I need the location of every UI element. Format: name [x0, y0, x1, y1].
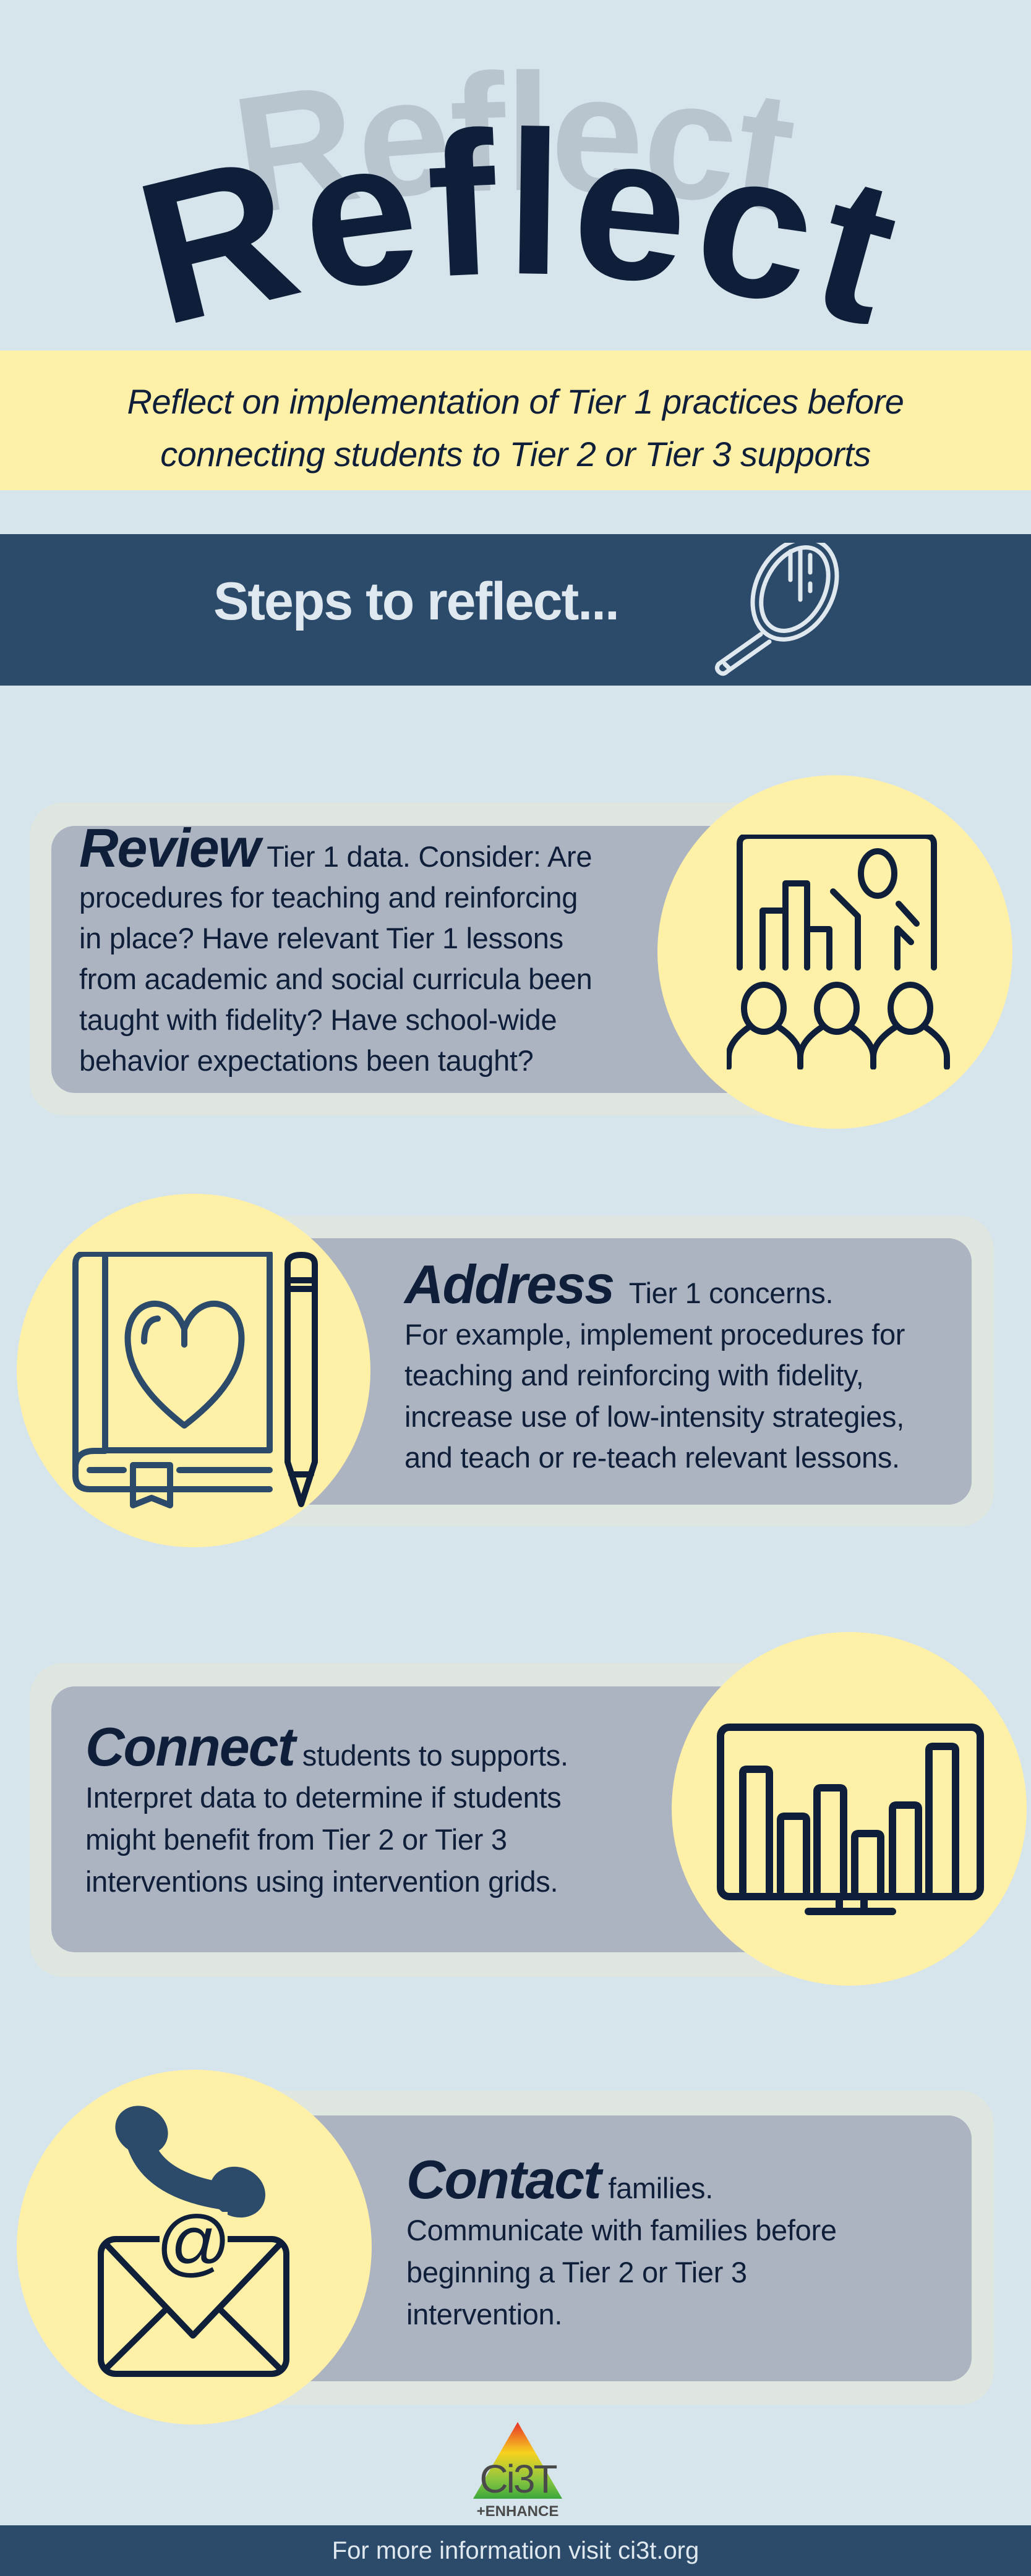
text: contact	[406, 2149, 837, 2331]
text: connect: Connect students to supports.	[85, 1716, 568, 1777]
text: address: teaching and reinforcing with fidelity,	[404, 1359, 863, 1392]
text: review: procedures for teaching and reinforcing	[79, 881, 578, 914]
text: connect: might benefit from Tier 2 or Tier 3	[85, 1823, 507, 1856]
text: review	[79, 817, 592, 1077]
title: Reflect	[142, 69, 896, 324]
logo: Ci3T Enhance: +ENHANCE	[477, 2503, 558, 2520]
steps band	[0, 534, 1031, 686]
icon circle: book and pencil	[17, 1194, 370, 1547]
text: contact: Contact families.	[406, 2149, 713, 2210]
text: contact: Communicate with families before	[406, 2214, 837, 2247]
panel: contact	[17, 2070, 994, 2425]
text: address: For example, implement procedures for	[404, 1318, 905, 1350]
text: review: taught with fidelity? Have school-wide	[79, 1003, 557, 1036]
ghost title: Reflect	[239, 69, 794, 210]
text: address	[403, 1254, 905, 1474]
subtitle text: connecting students to Tier 2 or Tier 3 supports	[160, 435, 871, 474]
panel: address	[17, 1194, 994, 1547]
text: contact: intervention.	[406, 2298, 562, 2331]
text: review: from academic and social curricula been	[79, 963, 592, 995]
text: address: and teach or re-teach relevant lessons.	[404, 1441, 900, 1474]
text: contact: beginning a Tier 2 or Tier 3	[406, 2256, 747, 2289]
subtitle text	[127, 382, 904, 474]
text: connect	[85, 1716, 568, 1898]
text: address: Address Tier 1 concerns.	[404, 1254, 833, 1315]
panel: connect	[30, 1632, 1027, 1986]
subtitle text: Reflect on implementation of Tier 1 practices before	[127, 382, 904, 421]
icon circle: presentation	[657, 775, 1012, 1129]
icon: hand mirror	[715, 543, 839, 676]
text: review: Review Tier 1 data. Consider: Are	[79, 817, 592, 878]
icon circle: chart monitor	[672, 1632, 1027, 1986]
text: connect: interventions using intervention grids.	[85, 1865, 558, 1898]
icon circle: phone and email	[17, 2070, 372, 2425]
logo: Ci3T Enhance: Ci3T	[479, 2457, 557, 2501]
steps heading: Steps to reflect...	[213, 572, 618, 631]
logo: Ci3T Enhance	[473, 2422, 562, 2520]
text: connect: Interpret data to determine if students	[85, 1781, 561, 1814]
panel: review	[30, 775, 1012, 1129]
icon: envelope	[98, 2206, 289, 2377]
footer	[0, 2525, 1031, 2576]
text: review: behavior expectations been taught?	[79, 1044, 534, 1077]
text: address: increase use of low-intensity strategies,	[404, 1400, 904, 1433]
text: review: in place? Have relevant Tier 1 lessons	[79, 922, 563, 954]
subtitle band	[0, 351, 1031, 490]
footer text: For more information visit ci3t.org	[332, 2537, 699, 2564]
icon: phone	[115, 2106, 265, 2218]
